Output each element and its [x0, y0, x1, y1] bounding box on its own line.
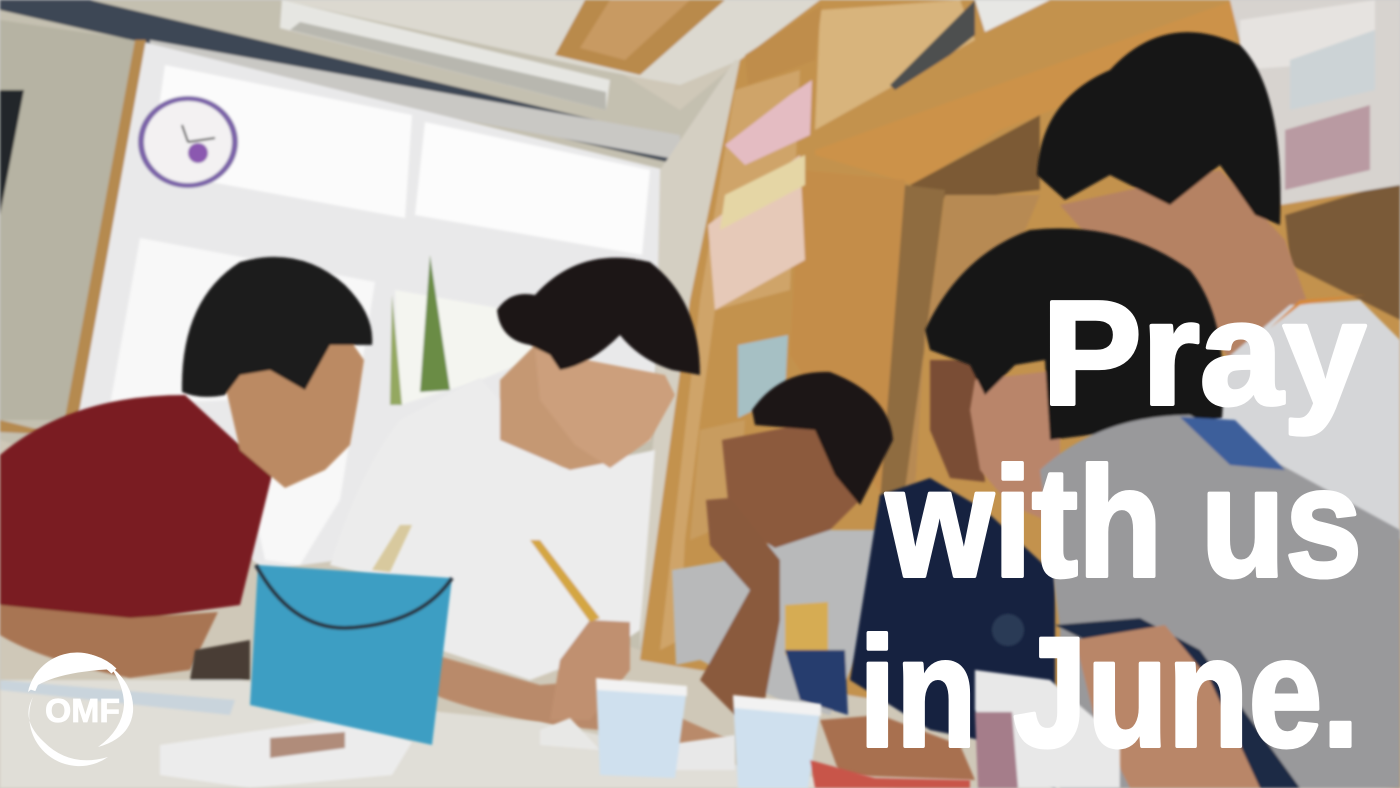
person: woman in white shirt — [330, 258, 730, 745]
ceiling — [280, 0, 830, 85]
person: small boy with hand on cheek — [672, 372, 893, 715]
headline: Pray — [1042, 271, 1366, 436]
shelves block — [640, 0, 1400, 788]
wood trim — [65, 40, 146, 418]
plant — [420, 255, 450, 392]
top shelf board — [815, 0, 1235, 185]
logo: OMF: OMF — [45, 692, 120, 729]
person: front boy in grey shirt — [925, 228, 1400, 788]
person: boy in red shirt — [0, 257, 372, 678]
books — [738, 335, 788, 418]
clock — [138, 96, 238, 188]
shelf shadow — [1285, 180, 1400, 320]
person: boy in navy shirt — [820, 360, 1055, 788]
TV edge — [0, 90, 24, 215]
craft cups and foreground items — [596, 670, 1120, 788]
logo: OMF — [28, 653, 133, 766]
fluorescent lamp — [280, 0, 610, 110]
table with craft items — [0, 640, 900, 788]
person: tall boy at back — [1037, 32, 1400, 540]
headline — [859, 271, 1366, 780]
black items on shelf — [890, 0, 975, 90]
window frame — [75, 40, 665, 570]
wall panel between window and shelf — [640, 60, 745, 650]
wall left — [0, 0, 740, 650]
panes — [150, 65, 412, 218]
blue bucket — [250, 525, 452, 745]
fabric stack — [708, 155, 805, 310]
curtain rail — [0, 0, 680, 165]
